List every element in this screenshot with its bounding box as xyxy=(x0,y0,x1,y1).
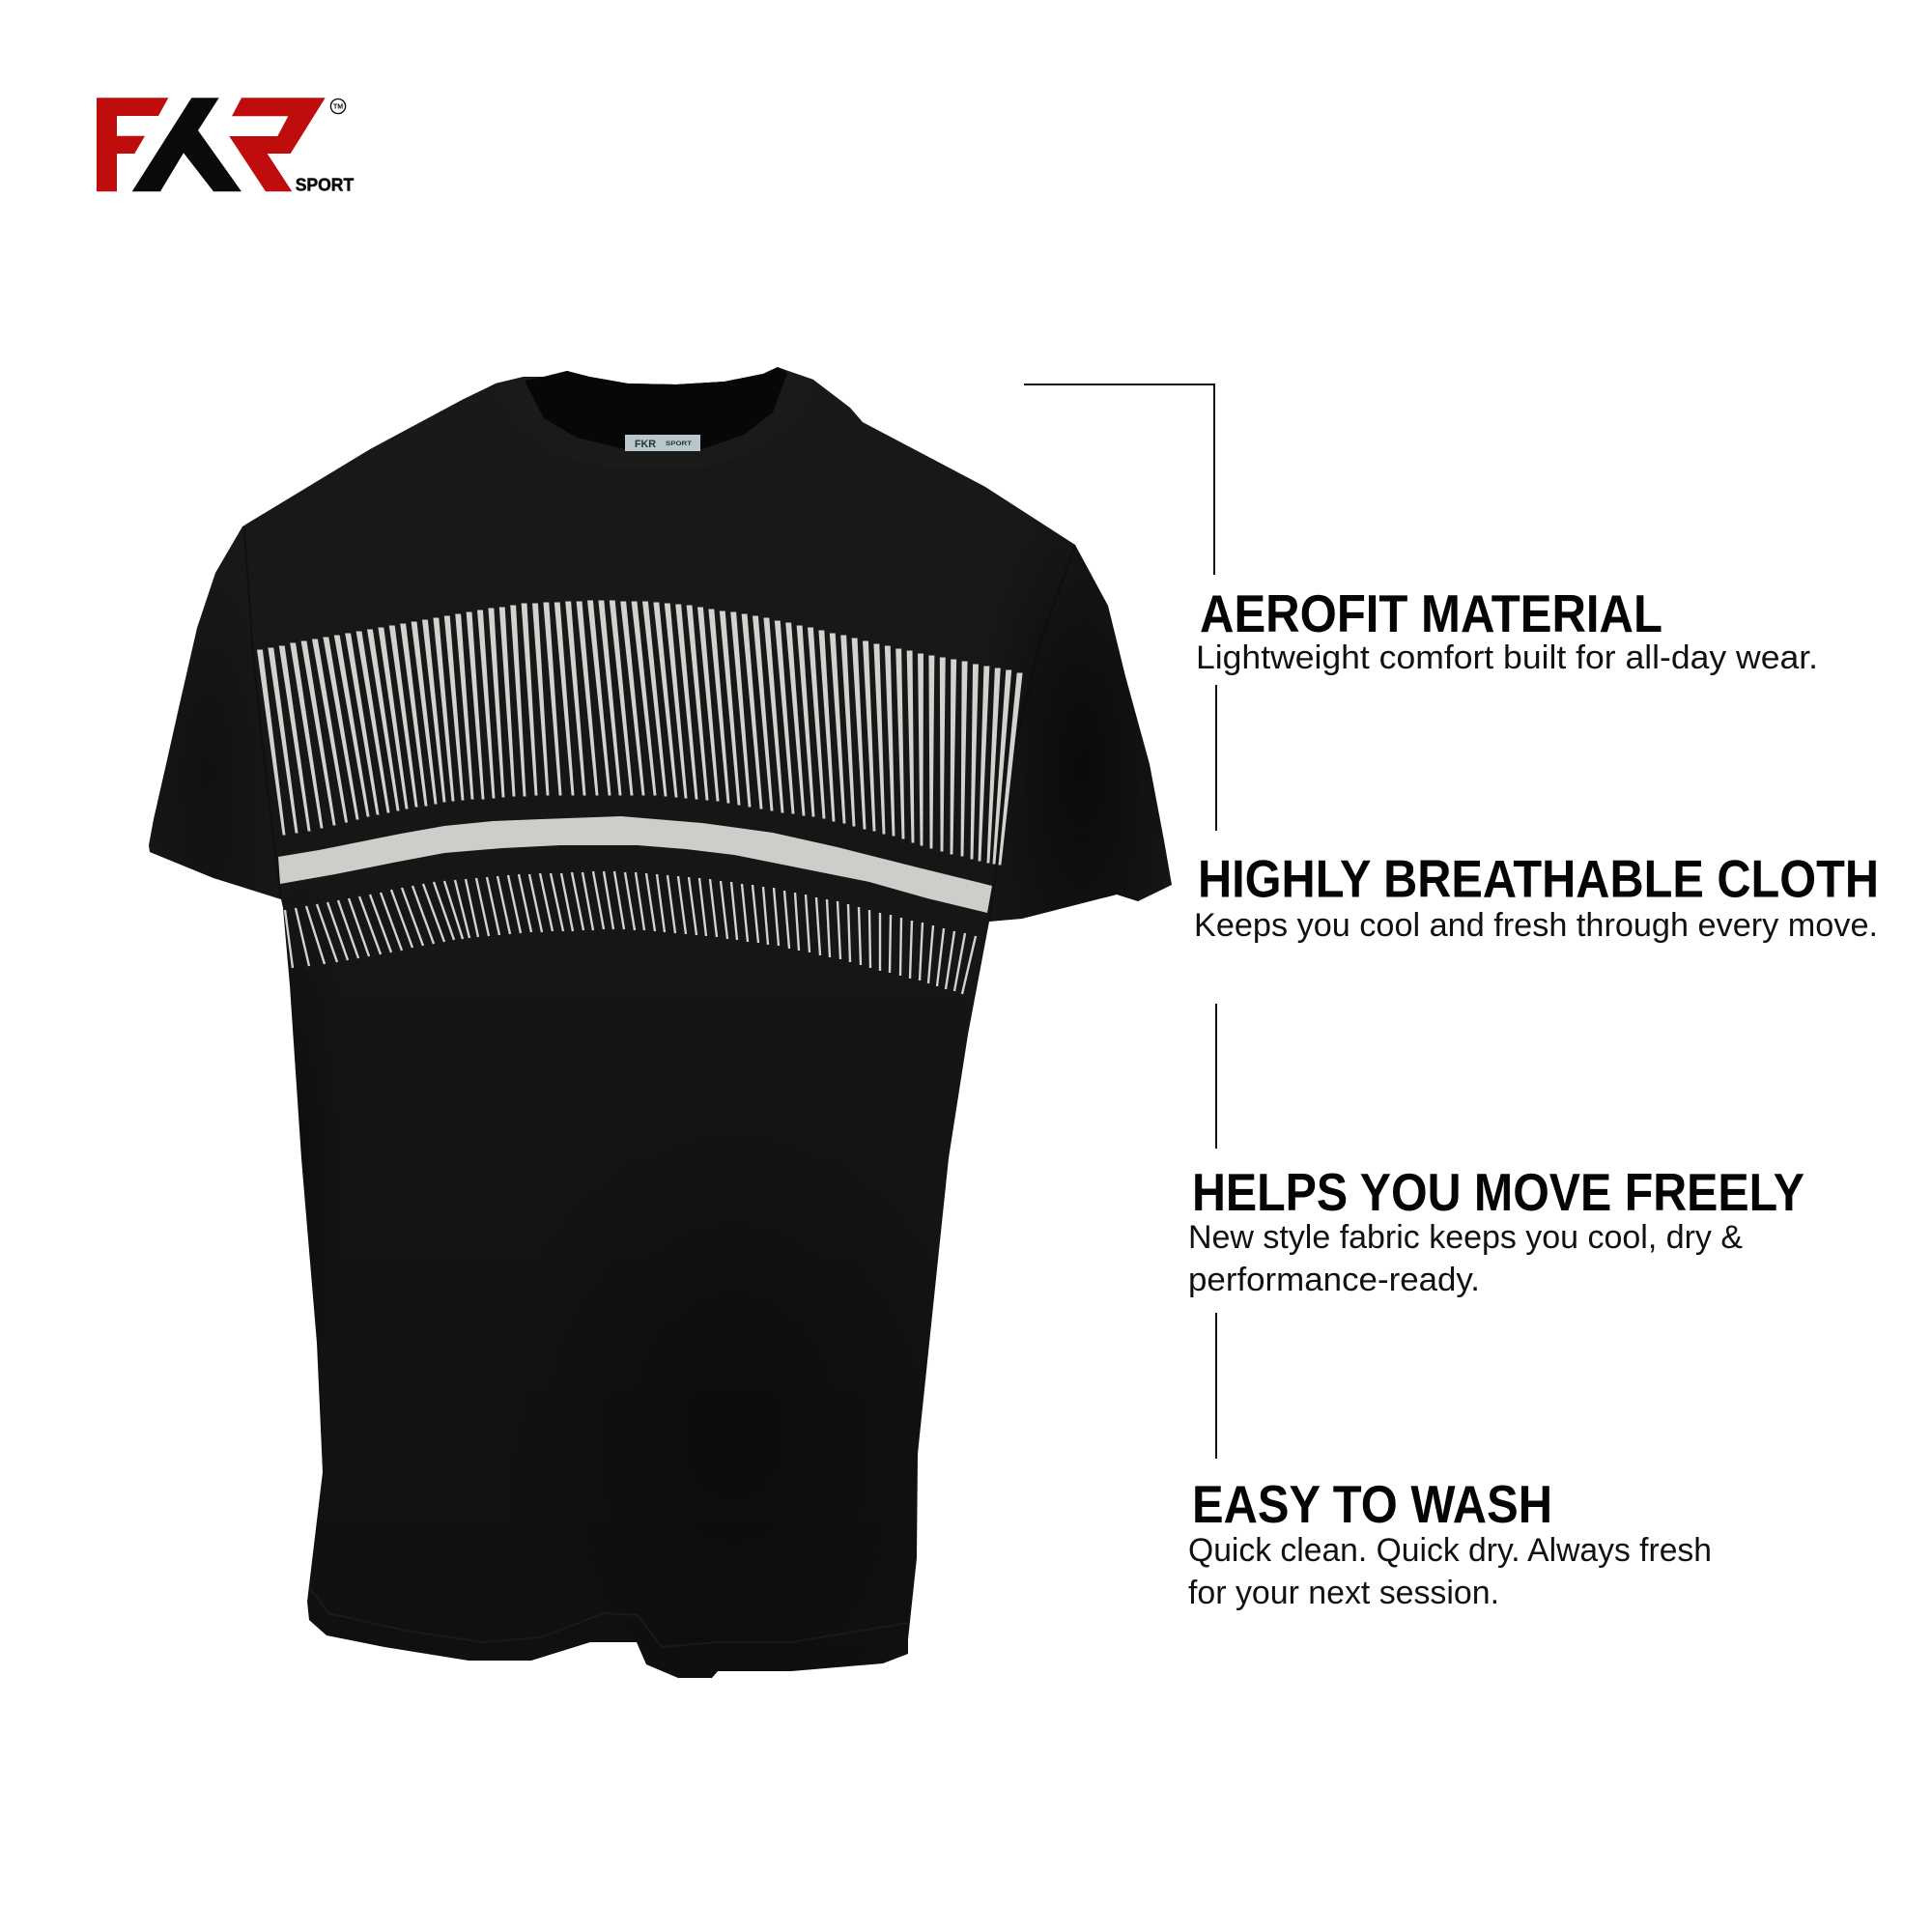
feature: easy to wash xyxy=(1188,1474,1712,1611)
logo: FKR Sport xyxy=(97,98,355,195)
description: New style fabric keeps you cool, dry & xyxy=(1188,1219,1743,1256)
heading: EASY TO WASH xyxy=(1192,1474,1552,1534)
shirt body silhouette xyxy=(149,367,1172,1678)
connector: line three xyxy=(1215,1004,1217,1149)
description xyxy=(1188,1219,1743,1298)
connector: line four xyxy=(1215,1313,1217,1459)
chest print: lower stripes xyxy=(285,871,976,994)
chest print: solid band xyxy=(278,816,992,913)
chest print: upper tapered stripes xyxy=(257,601,1022,865)
connector: line two xyxy=(1215,685,1217,831)
neck label: SPORT xyxy=(666,441,692,447)
inner neck xyxy=(525,367,787,449)
collar band xyxy=(496,367,813,469)
product photo: black t-shirt xyxy=(140,367,1188,1777)
fabric shading xyxy=(140,473,1188,1777)
heading: AEROFIT MATERIAL xyxy=(1200,583,1662,643)
description: Keeps you cool and fresh through every move. xyxy=(1194,907,1878,944)
description: Quick clean. Quick dry. Always fresh xyxy=(1188,1532,1712,1569)
neck label: FKR xyxy=(635,439,656,450)
feature: aerofit material xyxy=(1196,583,1818,676)
description: for your next session. xyxy=(1188,1575,1499,1611)
description: Lightweight comfort built for all-day wear. xyxy=(1196,639,1818,676)
neck label xyxy=(625,435,700,451)
logo: FKR Sport: TM xyxy=(333,104,343,110)
heading: HELPS YOU MOVE FREELY xyxy=(1192,1162,1804,1222)
logo: FKR Sport: SPORT xyxy=(296,175,355,195)
description: performance-ready. xyxy=(1188,1262,1480,1298)
feature: helps you move freely xyxy=(1188,1162,1804,1298)
feature: highly breathable cloth xyxy=(1194,848,1879,944)
sleeve seams and hem stitching xyxy=(244,528,1075,922)
connector: top elbow line xyxy=(1024,384,1214,575)
description xyxy=(1188,1532,1712,1611)
